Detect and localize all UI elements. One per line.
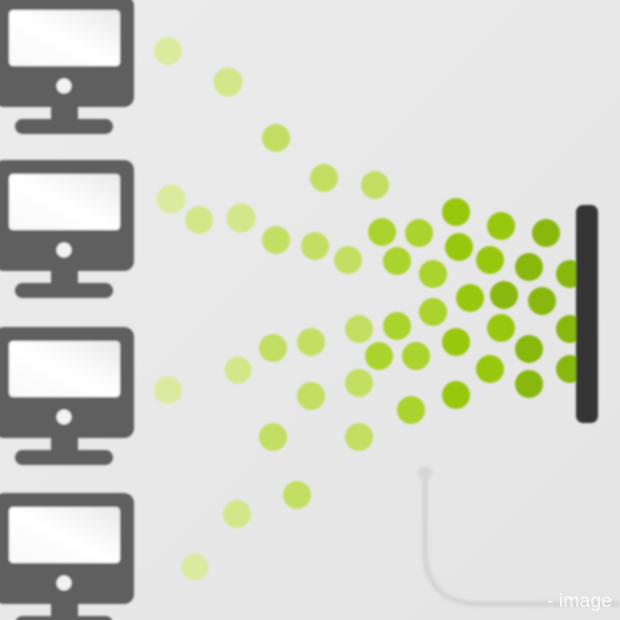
mid packets xyxy=(259,124,389,509)
icon: computer 2 xyxy=(0,160,134,298)
icon: computer 4 xyxy=(0,493,134,620)
icon: computer 1 xyxy=(0,0,134,134)
light packets xyxy=(185,68,256,528)
darkest packets near the barrier xyxy=(490,219,584,398)
computers column xyxy=(0,0,134,620)
curved callout line xyxy=(418,466,620,604)
saturated packets xyxy=(442,198,515,409)
faint packets on the left xyxy=(154,37,208,580)
barrier xyxy=(576,205,598,423)
icon: computer 3 xyxy=(0,327,134,465)
bright packets xyxy=(365,218,447,424)
watermark: - image xyxy=(547,590,612,612)
data packets xyxy=(154,37,598,580)
